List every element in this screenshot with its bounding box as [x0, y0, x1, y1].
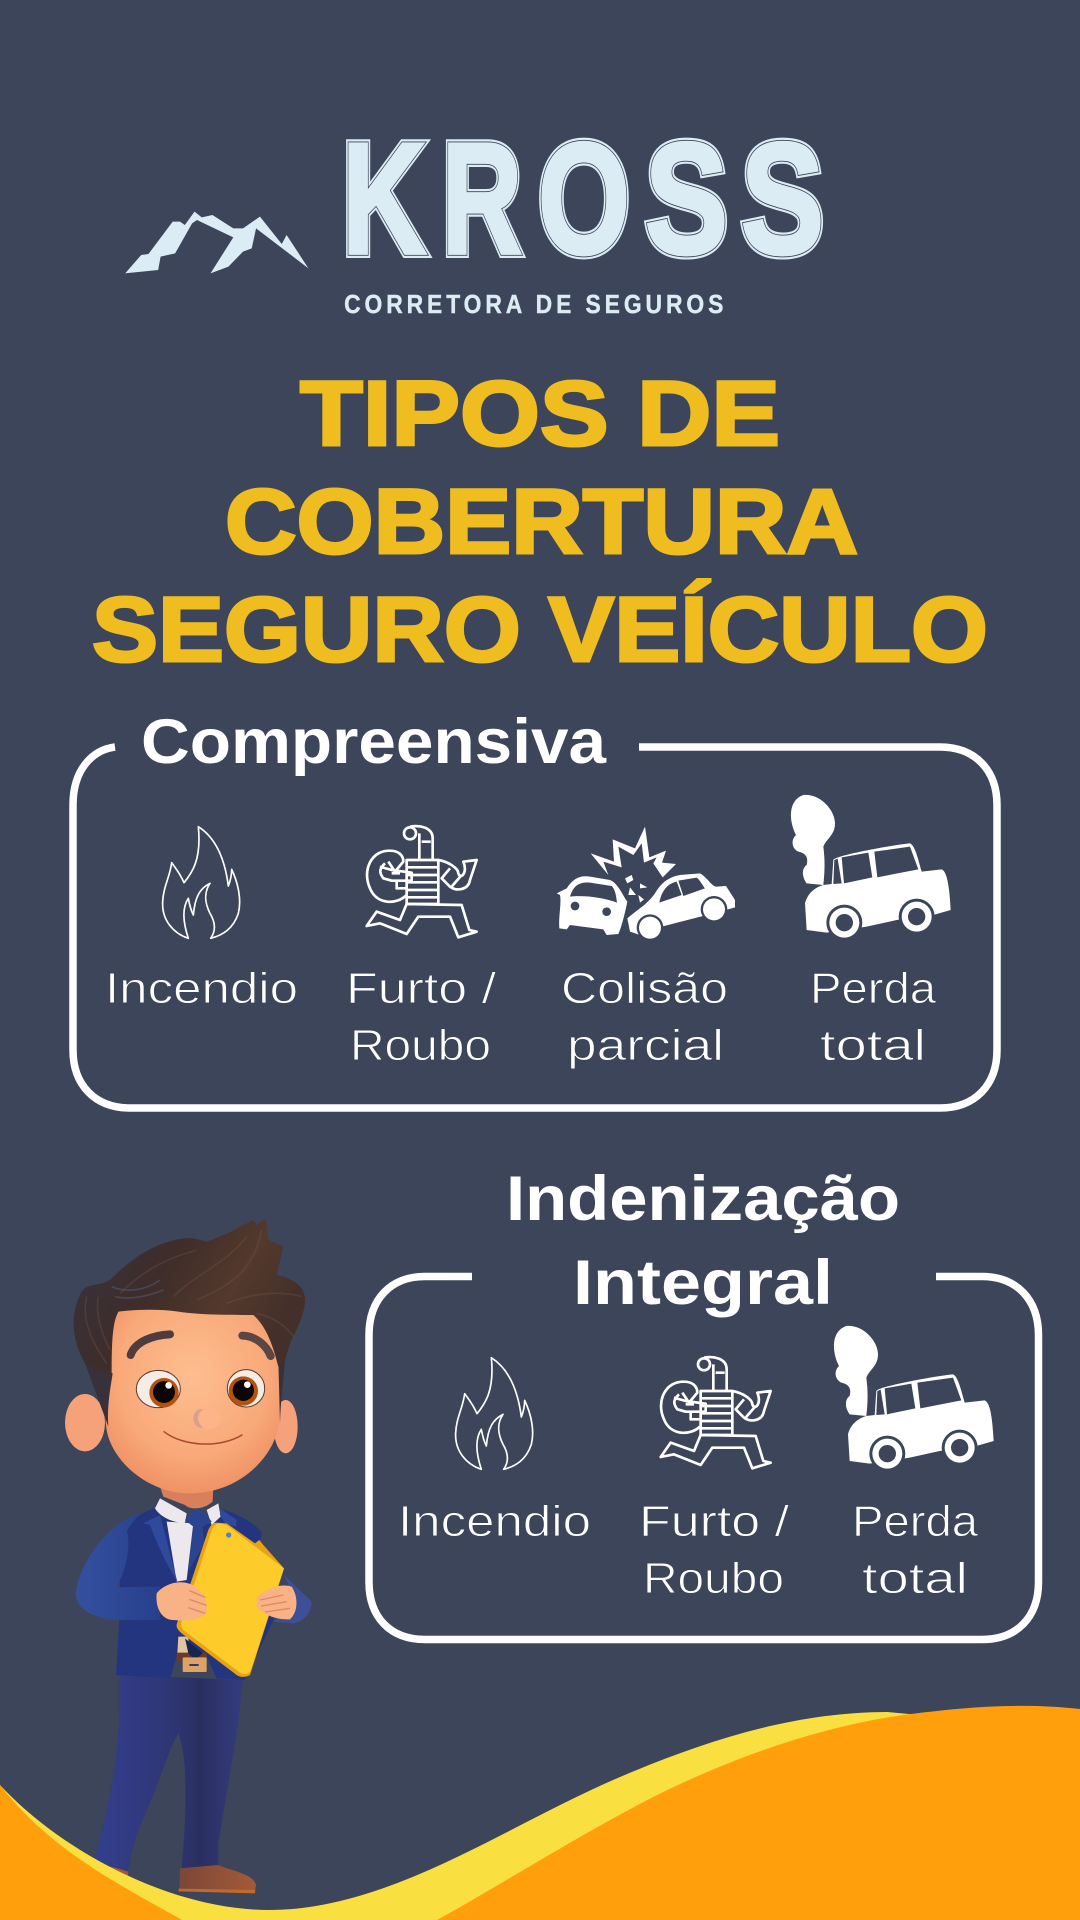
tie — [185, 1510, 212, 1572]
logo: Kross — [125, 111, 824, 319]
heading: Compreensiva: Compreensiva — [141, 707, 607, 777]
face — [105, 1305, 281, 1493]
shirt — [155, 1498, 221, 1582]
label: Incendio: Incendio — [105, 964, 298, 1013]
wordmark inline layer: O — [538, 111, 630, 287]
heading: Indenização Integral: Integral — [573, 1248, 833, 1318]
label: Furto / Roubo: Furto / — [346, 964, 497, 1013]
icon: mountain — [125, 212, 308, 273]
wordmark outer layer: K — [342, 111, 426, 287]
wordmark outer layer: S — [645, 111, 728, 287]
label: Furto / Roubo: Roubo — [350, 1021, 491, 1070]
label: Furto / Roubo — [346, 964, 497, 1070]
clipboard — [177, 1523, 284, 1677]
wave: yellow — [0, 1712, 1080, 1920]
label: Colisão parcial — [561, 964, 728, 1070]
label: Perda total: Perda — [852, 1497, 979, 1546]
wordmark core layer: R — [442, 111, 522, 287]
wordmark core layer: O — [538, 111, 630, 287]
icon: wrecked car — [791, 795, 951, 941]
upper body — [76, 1487, 312, 1680]
ears — [65, 1394, 298, 1453]
panel border — [73, 747, 997, 1108]
heading: Indenização Integral — [506, 1164, 900, 1318]
wordmark outer layer — [342, 111, 824, 287]
wordmark outer layer: R — [442, 111, 522, 287]
icon: thief — [367, 826, 477, 937]
logo subtitle: CORRETORA DE SEGUROS — [344, 291, 723, 319]
lapel — [143, 1508, 237, 1582]
wordmark outer layer: S — [741, 111, 824, 287]
label: Colisão parcial: parcial — [567, 1021, 724, 1070]
right sleeve — [273, 1575, 312, 1623]
label: Perda total: total — [862, 1554, 968, 1603]
label: Perda total: total — [820, 1021, 926, 1070]
wordmark core layer: S — [741, 111, 824, 287]
neck — [160, 1487, 213, 1508]
wordmark outer layer: O — [538, 111, 630, 287]
wordmark inline layer — [342, 111, 824, 287]
icon: car collision — [557, 827, 735, 941]
label: Perda total: Perda — [810, 964, 937, 1013]
wordmark inline layer: S — [741, 111, 824, 287]
trousers and shoes — [95, 1675, 256, 1893]
jacket torso — [116, 1508, 280, 1680]
title: TIPOS DE — [300, 363, 780, 465]
panel border — [369, 1276, 1038, 1640]
title: SEGURO VEÍCULO — [92, 578, 988, 681]
label: Incendio: Incendio — [398, 1497, 591, 1546]
hair — [74, 1218, 305, 1427]
label: Furto / Roubo — [639, 1497, 790, 1603]
label: Perda total — [810, 964, 937, 1070]
icon: wrecked car — [834, 1326, 994, 1472]
title — [92, 363, 988, 681]
eyebrows — [131, 1334, 271, 1356]
label: Colisão parcial: Colisão — [561, 964, 728, 1013]
mouth — [164, 1432, 242, 1444]
wordmark inline layer: K — [342, 111, 426, 287]
heading: Indenização Integral: Indenização — [506, 1164, 900, 1234]
hands — [156, 1582, 296, 1621]
icon: thief — [661, 1357, 771, 1468]
wordmark inline layer: S — [645, 111, 728, 287]
panel: Compreensiva — [73, 707, 997, 1108]
wave: orange — [0, 1706, 1080, 1920]
panel: Indenização Integral — [369, 1164, 1038, 1640]
wordmark inline layer: R — [442, 111, 522, 287]
left sleeve — [76, 1513, 160, 1620]
belt and buckle — [177, 1637, 188, 1653]
eyes — [136, 1370, 265, 1408]
icon: flame — [456, 1358, 533, 1469]
head — [65, 1218, 305, 1493]
wordmark core layer: K — [342, 111, 426, 287]
character: insurance broker — [65, 1218, 312, 1893]
wordmark core layer — [342, 111, 824, 287]
icon: flame — [163, 827, 240, 938]
title: COBERTURA — [225, 471, 858, 573]
logo wordmark — [342, 111, 824, 287]
label: Furto / Roubo: Roubo — [643, 1554, 784, 1603]
wordmark core layer: S — [645, 111, 728, 287]
label: Furto / Roubo: Furto / — [639, 1497, 790, 1546]
nose — [193, 1408, 221, 1429]
label: Perda total — [852, 1497, 979, 1603]
